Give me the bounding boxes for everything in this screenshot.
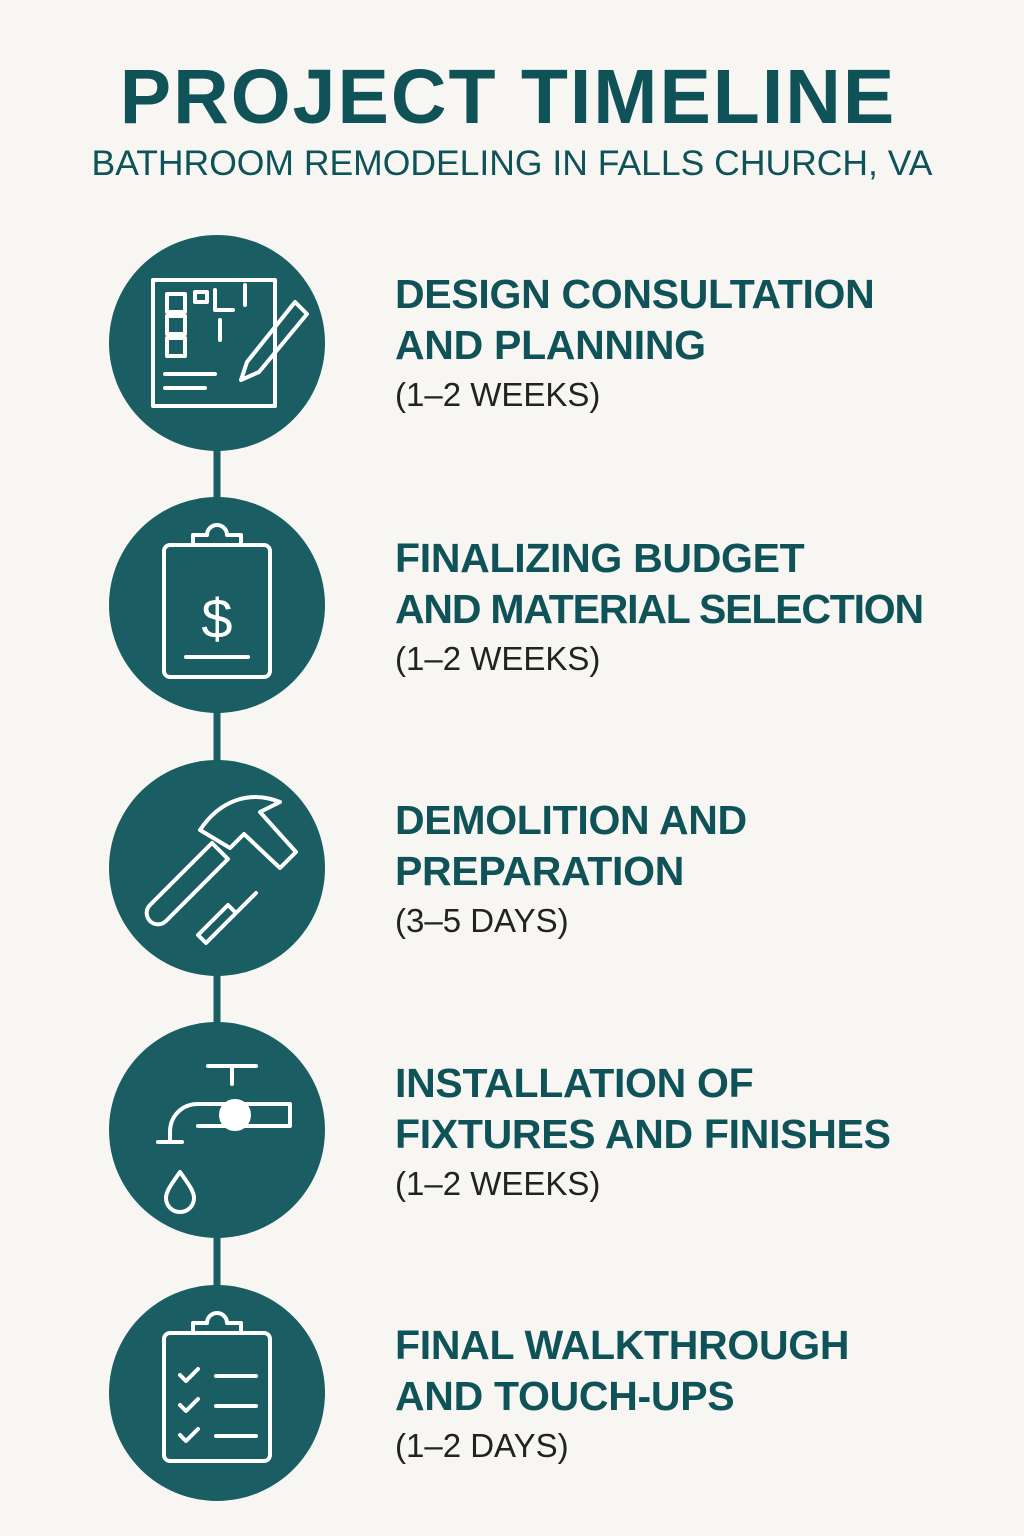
step 1 text: DESIGN CONSULTATION — [395, 271, 874, 317]
icon: blueprint — [109, 235, 325, 451]
step 5 text: FINAL WALKTHROUGH — [395, 1322, 849, 1368]
step 2 text: AND MATERIAL SELECTION — [395, 586, 923, 632]
step 3 text: DEMOLITION AND — [395, 797, 747, 843]
step 1 text — [395, 271, 874, 413]
step 3 text: PREPARATION — [395, 848, 684, 894]
icon: budget clipboard: $ — [201, 587, 233, 650]
step 5 text: (1–2 DAYS) — [395, 1427, 569, 1464]
icon: budget clipboard — [109, 497, 325, 713]
step 1 text: (1–2 WEEKS) — [395, 376, 600, 413]
step 3 text — [395, 797, 747, 939]
icon: checklist — [109, 1285, 325, 1501]
step 5 text: AND TOUCH-UPS — [395, 1373, 734, 1419]
subtitle: BATHROOM REMODELING IN FALLS CHURCH, VA — [92, 143, 932, 183]
icon: hammer and screwdriver — [109, 760, 325, 976]
step 4 text — [395, 1060, 891, 1202]
step 4 text: (1–2 WEEKS) — [395, 1165, 600, 1202]
step 5 text — [395, 1322, 849, 1464]
step 2 text: FINALIZING BUDGET — [395, 535, 804, 581]
step 4 text: FIXTURES AND FINISHES — [395, 1111, 891, 1157]
step 2 text: (1–2 WEEKS) — [395, 640, 600, 677]
step 1 text: AND PLANNING — [395, 322, 706, 368]
step 4 text: INSTALLATION OF — [395, 1060, 753, 1106]
title: PROJECT TIMELINE — [120, 54, 896, 140]
step 3 text: (3–5 DAYS) — [395, 902, 569, 939]
step 2 text — [395, 535, 923, 677]
icon: faucet — [109, 1022, 325, 1238]
